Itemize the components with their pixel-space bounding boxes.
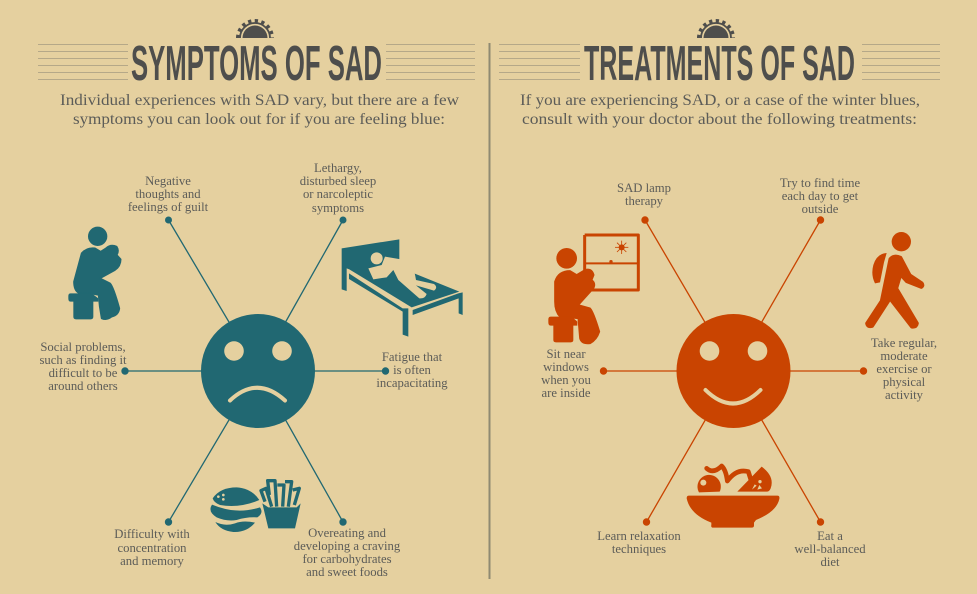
label: fatigue: incapacitating xyxy=(376,376,448,390)
label: exercise: physical xyxy=(883,375,926,389)
title: symptoms: SYMPTOMS OF SAD xyxy=(131,37,382,91)
intro text: treatments xyxy=(520,92,920,128)
intro text: treatments: consult with your doctor about the following treatments: xyxy=(522,111,917,128)
icon: sad face xyxy=(201,314,315,428)
icon: sun right xyxy=(699,21,733,38)
label: lethargy: symptoms xyxy=(312,201,364,215)
label: relaxation: Learn relaxation xyxy=(597,529,681,543)
label: windows: are inside xyxy=(542,386,591,400)
icon: burger and fries xyxy=(210,481,301,532)
label: lethargy: or narcoleptic xyxy=(303,187,373,201)
icon: person at window xyxy=(548,235,638,343)
label: windows: windows xyxy=(543,360,589,374)
label: windows: Sit near xyxy=(546,347,586,361)
label: SAD lamp: SAD lamp xyxy=(617,181,671,195)
icon: happy face xyxy=(676,314,790,428)
label: negative thoughts: thoughts and xyxy=(135,187,201,201)
icon: salad bowl xyxy=(687,466,779,528)
label: diet: well-balanced xyxy=(794,542,866,556)
label: overeating: and sweet foods xyxy=(306,565,388,579)
spokes: symptoms xyxy=(121,216,389,526)
label: social problems: difficult to be xyxy=(49,366,118,380)
label: difficulty: and memory xyxy=(120,554,185,568)
panel: treatments xyxy=(499,21,940,569)
label: exercise: exercise or xyxy=(876,362,932,376)
heading rules right xyxy=(499,44,940,80)
label: diet: Eat a xyxy=(817,529,843,543)
label: lethargy: Lethargy, xyxy=(314,161,362,175)
label: windows: when you xyxy=(541,373,591,387)
label: exercise: Take regular, xyxy=(871,336,937,350)
spokes: treatments xyxy=(600,216,867,526)
panel: symptoms xyxy=(38,21,475,579)
label: lethargy: disturbed sleep xyxy=(300,174,376,188)
heading rules left xyxy=(38,44,475,80)
label: negative thoughts: Negative xyxy=(145,174,191,188)
label: negative thoughts: feelings of guilt xyxy=(128,200,209,214)
intro text: symptoms xyxy=(60,92,460,128)
intro text: symptoms: Individual experiences with SAD vary, but there are a few xyxy=(60,92,460,109)
icon: sun left xyxy=(238,21,272,38)
label: overeating: developing a craving xyxy=(294,539,401,553)
label: social problems: Social problems, xyxy=(40,340,126,354)
label: SAD lamp: therapy xyxy=(625,194,664,208)
icon: thinking person xyxy=(68,227,121,319)
label: fatigue: Fatigue that xyxy=(382,350,443,364)
label: fatigue: is often xyxy=(393,363,432,377)
label: overeating: for carbohydrates xyxy=(302,552,392,566)
label: diet: diet xyxy=(820,555,840,569)
label: outside: Try to find time xyxy=(780,176,860,190)
label: exercise: activity xyxy=(885,388,924,402)
label: difficulty: concentration xyxy=(117,541,187,555)
label: relaxation: techniques xyxy=(612,542,666,556)
icon: walking person xyxy=(867,232,923,327)
label: outside: each day to get xyxy=(782,189,859,203)
icon: person on bed xyxy=(342,239,463,337)
label: social problems: such as finding it xyxy=(39,353,127,367)
label: social problems: around others xyxy=(48,379,118,393)
intro text: treatments: If you are experiencing SAD, or a case of the winter blues, xyxy=(520,92,920,109)
label: outside: outside xyxy=(802,202,839,216)
label: difficulty: Difficulty with xyxy=(114,527,190,541)
label: exercise: moderate xyxy=(880,349,928,363)
intro text: symptoms: symptoms you can look out for if you are feeling blue: xyxy=(73,111,445,128)
label: overeating: Overeating and xyxy=(308,526,387,540)
